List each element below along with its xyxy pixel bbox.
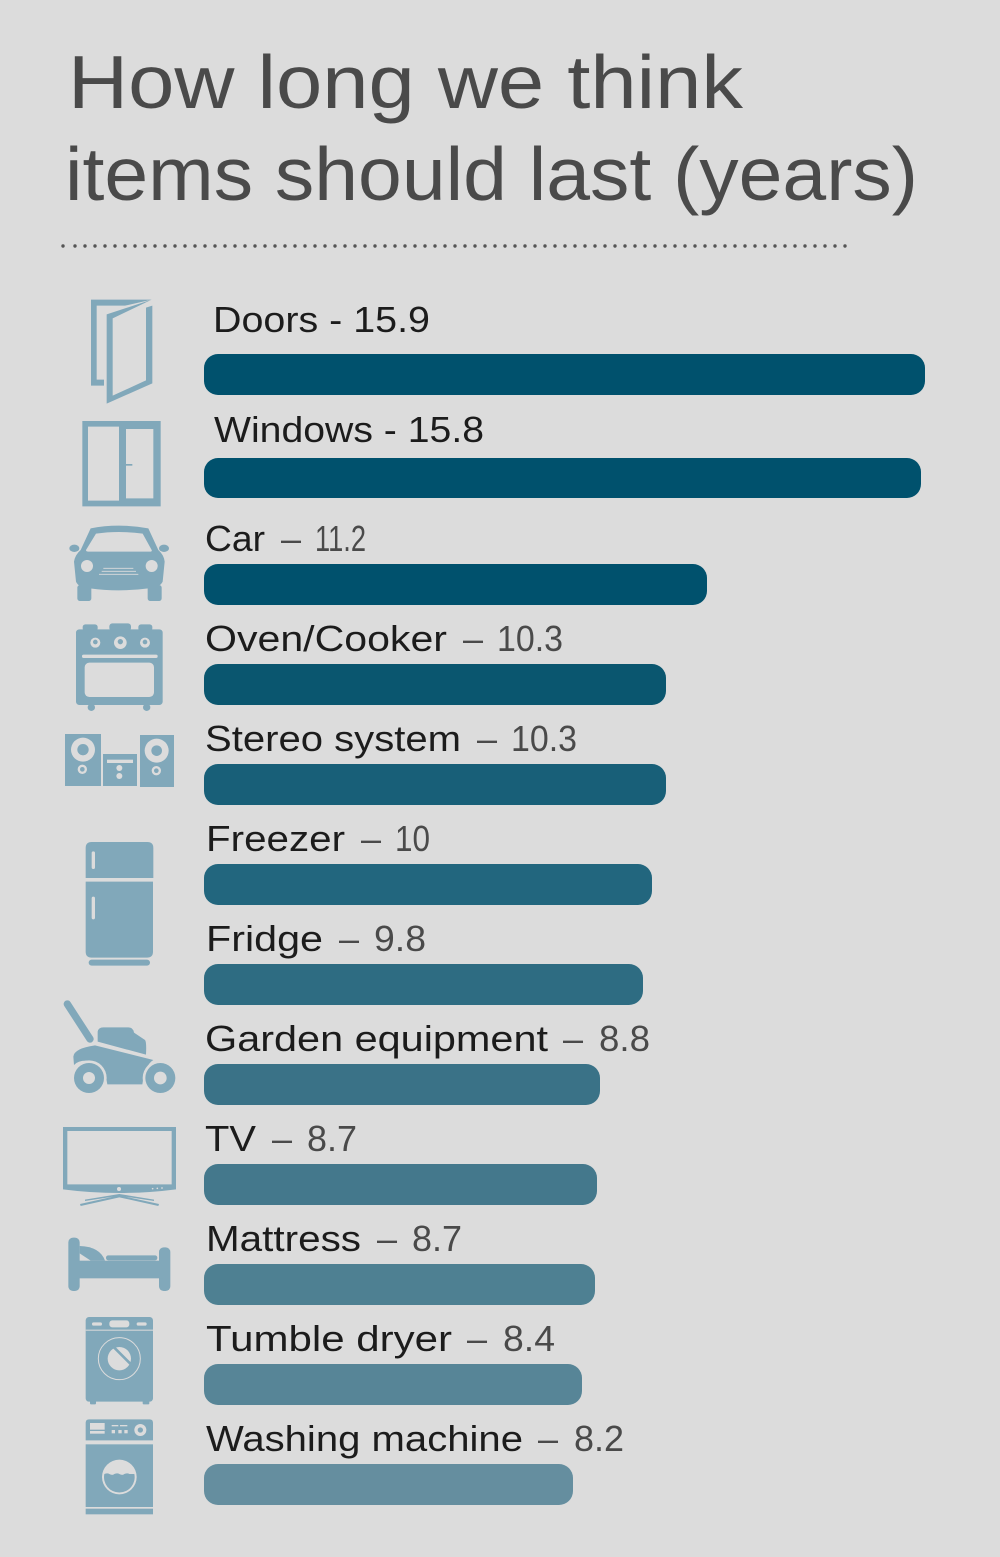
row: tumble dryer: – bbox=[467, 1318, 487, 1359]
icon: tumble dryer bbox=[86, 1317, 153, 1404]
row: stereo system: Stereo system bbox=[205, 718, 461, 759]
title bbox=[65, 40, 918, 216]
row: freezer: 10 bbox=[395, 818, 430, 859]
row: oven/cooker: 10.3 bbox=[497, 618, 563, 659]
row: washing machine: Washing machine bbox=[206, 1418, 523, 1459]
icon: car bbox=[69, 526, 169, 601]
row: oven/cooker bbox=[204, 618, 666, 705]
row: doors: Doors - 15.9 bbox=[213, 299, 430, 340]
row: mattress: 8.7 bbox=[412, 1218, 462, 1259]
row: garden equipment: 8.8 bbox=[599, 1018, 650, 1059]
row: stereo system: 10.3 bbox=[511, 718, 577, 759]
icon: door bbox=[91, 300, 152, 404]
row: tumble dryer bbox=[204, 1318, 582, 1405]
row: garden equipment bbox=[204, 1018, 650, 1105]
icon: window bbox=[82, 421, 161, 506]
row: doors bbox=[204, 299, 925, 395]
title: How long we think bbox=[68, 40, 744, 124]
icon: lawn mower bbox=[67, 1004, 178, 1096]
row: windows: Windows - 15.8 bbox=[214, 409, 484, 450]
row: car: Car bbox=[205, 518, 265, 559]
row: tv: TV bbox=[205, 1118, 256, 1159]
title: items should last (years) bbox=[65, 132, 918, 216]
row: mattress: Mattress bbox=[206, 1218, 361, 1259]
row: mattress bbox=[204, 1218, 595, 1305]
row: stereo system: – bbox=[477, 718, 497, 759]
row: stereo system bbox=[204, 718, 666, 805]
row: freezer: – bbox=[361, 818, 381, 859]
row: washing machine: 8.2 bbox=[574, 1418, 624, 1459]
icon: television bbox=[63, 1127, 176, 1206]
row: washing machine: – bbox=[538, 1418, 558, 1459]
row: washing machine bbox=[204, 1418, 624, 1505]
icon: fridge freezer bbox=[86, 842, 153, 966]
row: tv: – bbox=[272, 1118, 292, 1159]
row: fridge bbox=[204, 918, 643, 1005]
row: tv bbox=[204, 1118, 597, 1205]
row: fridge: Fridge bbox=[206, 918, 323, 959]
row: fridge: 9.8 bbox=[374, 918, 426, 959]
row: tumble dryer: Tumble dryer bbox=[206, 1318, 452, 1359]
row: oven/cooker: – bbox=[463, 618, 483, 659]
row: fridge: – bbox=[339, 918, 359, 959]
row: garden equipment: – bbox=[563, 1018, 583, 1059]
row: car bbox=[204, 518, 707, 605]
row: freezer: Freezer bbox=[206, 818, 345, 859]
icon: washing machine bbox=[86, 1419, 153, 1514]
icon: oven bbox=[76, 623, 163, 711]
row: car: – bbox=[281, 518, 301, 559]
row: oven/cooker: Oven/Cooker bbox=[205, 618, 447, 659]
row: tumble dryer: 8.4 bbox=[503, 1318, 555, 1359]
row: garden equipment: Garden equipment bbox=[205, 1018, 548, 1059]
icon: stereo system bbox=[65, 734, 174, 787]
row: freezer bbox=[204, 818, 652, 905]
row: tv: 8.7 bbox=[307, 1118, 357, 1159]
row: mattress: – bbox=[377, 1218, 397, 1259]
icon: bed bbox=[68, 1238, 170, 1291]
row: windows bbox=[204, 409, 921, 498]
row: car: 11.2 bbox=[315, 518, 366, 559]
